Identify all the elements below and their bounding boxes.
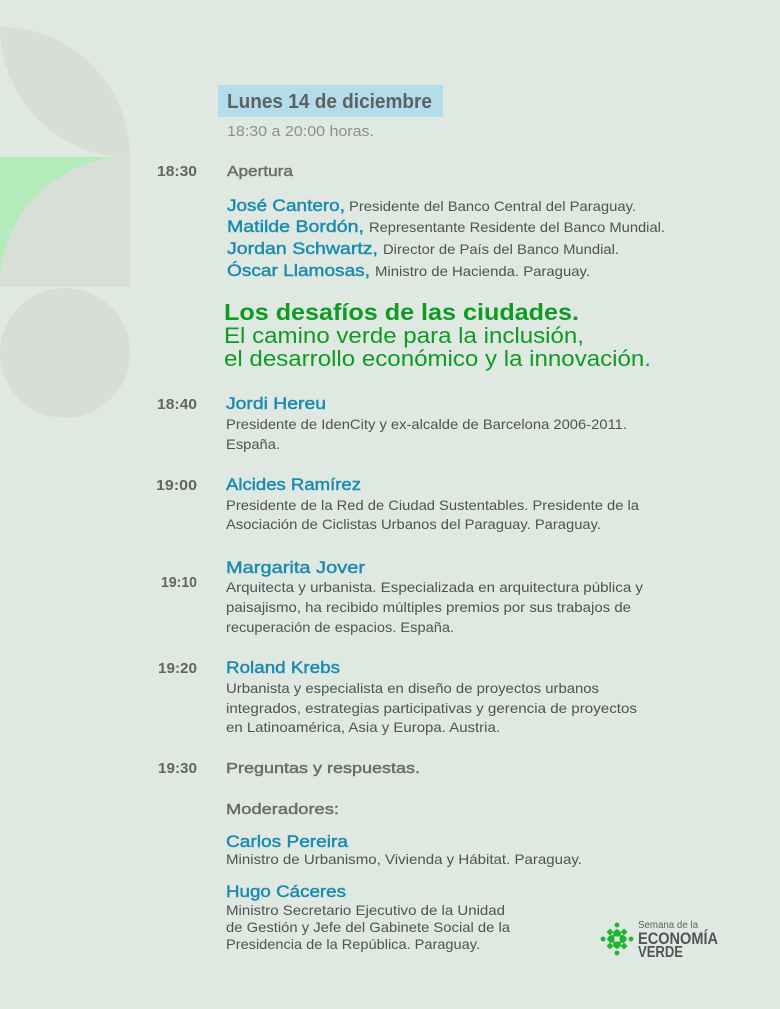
speaker: Jordi Hereu: Presidente de IdenCity y ex-alcalde de Barcelona 2006-2011. [226, 416, 627, 432]
green title: el desarrollo económico y la innovación. [224, 346, 651, 371]
speaker: Roland Krebs: en Latinoamérica, Asia y Europa. Austria. [226, 719, 500, 735]
opening block: Ministro de Hacienda. Paraguay. [375, 263, 590, 279]
moderator: Hugo Cáceres [226, 882, 510, 952]
opening block: Jordan Schwartz, [227, 239, 378, 258]
speaker: Roland Krebs: 19:20 [158, 660, 197, 677]
speaker: Roland Krebs: Roland Krebs [226, 658, 340, 677]
speaker: Roland Krebs [158, 658, 637, 735]
speaker: Alcides Ramírez: Alcides Ramírez [226, 475, 361, 494]
speaker: Margarita Jover: 19:10 [161, 574, 197, 591]
speaker: Jordi Hereu: 18:40 [157, 396, 197, 413]
speaker: Jordi Hereu: Jordi Hereu [226, 394, 326, 413]
speaker: Margarita Jover: paisajismo, ha recibido múltiples premios por sus trabajos de [226, 599, 631, 615]
opening block: Matilde Bordón, [227, 217, 364, 236]
speaker: Margarita Jover [161, 558, 643, 635]
moderator: Hugo Cáceres: Ministro Secretario Ejecutivo de la Unidad [226, 902, 505, 918]
moderator: Carlos Pereira [226, 832, 582, 867]
speaker: Jordi Hereu [157, 394, 627, 452]
logo: Semana de la Economía Verde [601, 920, 718, 961]
moderator: Carlos Pereira: Carlos Pereira [226, 832, 349, 851]
speaker: Margarita Jover: Arquitecta y urbanista. Especializada en arquitectura pública y [226, 579, 643, 595]
icon: green emblem [601, 923, 633, 955]
speaker: Alcides Ramírez: 19:00 [156, 477, 197, 494]
date heading [218, 85, 443, 117]
opening block: Director de País del Banco Mundial. [383, 241, 619, 257]
moderator: Hugo Cáceres: de Gestión y Jefe del Gabinete Social de la [226, 919, 510, 935]
opening block: Óscar Llamosas, [227, 261, 370, 280]
speaker: Alcides Ramírez: Asociación de Ciclistas Urbanos del Paraguay. Paraguay. [226, 516, 601, 532]
green title: El camino verde para la inclusión, [224, 323, 584, 348]
opening block [157, 163, 665, 280]
logo: Semana de la Economía Verde: VERDE [638, 944, 683, 961]
moderator: Hugo Cáceres: Hugo Cáceres [226, 882, 346, 901]
logo: Semana de la Economía Verde: Semana de la [638, 920, 698, 931]
questions and answers: 19:30 [158, 760, 197, 777]
speaker: Alcides Ramírez: Presidente de la Red de Ciudad Sustentables. Presidente de la [226, 497, 639, 513]
opening block: 18:30 [157, 163, 197, 180]
logo: Semana de la Economía Verde: ECONOMÍA [638, 929, 718, 948]
speaker: Roland Krebs: Urbanista y especialista en diseño de proyectos urbanos [226, 680, 599, 696]
moderator: Hugo Cáceres: Presidencia de la República. Paraguay. [226, 936, 480, 952]
speaker: Alcides Ramírez [156, 475, 639, 532]
green title [224, 299, 651, 371]
speaker: Jordi Hereu: España. [226, 436, 280, 452]
schedule hours: 18:30 a 20:00 horas. [227, 123, 374, 140]
decorative geometric shapes [0, 27, 130, 418]
opening block: Apertura [227, 163, 294, 180]
questions and answers [158, 760, 420, 777]
opening block: Presidente del Banco Central del Paraguay. [349, 198, 636, 214]
questions and answers: Preguntas y respuestas. [226, 760, 420, 777]
opening block: José Cantero, [227, 196, 345, 215]
moderator: Carlos Pereira: Ministro de Urbanismo, Vivienda y Hábitat. Paraguay. [226, 851, 582, 867]
speaker: Margarita Jover: recuperación de espacios. España. [226, 619, 454, 635]
speaker: Roland Krebs: integrados, estrategias participativas y gerencia de proyectos [226, 700, 637, 716]
speaker: Margarita Jover: Margarita Jover [226, 558, 365, 577]
green title: Los desafíos de las ciudades. [224, 299, 579, 325]
date heading: Lunes 14 de diciembre [227, 91, 432, 113]
opening block: Representante Residente del Banco Mundial. [369, 219, 665, 235]
moderators heading: Moderadores: [226, 801, 339, 818]
